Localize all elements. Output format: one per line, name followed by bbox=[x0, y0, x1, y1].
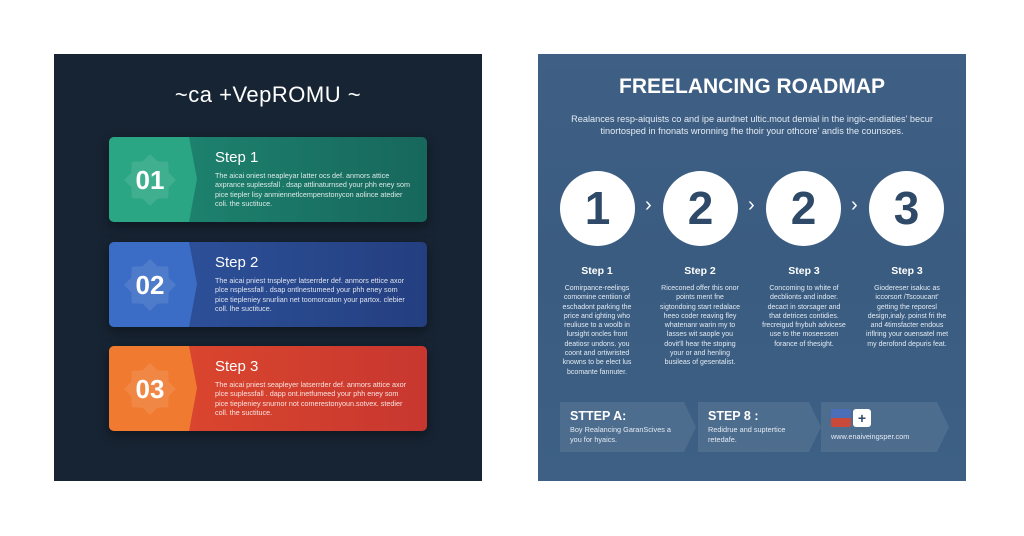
card: step 3: 03 bbox=[136, 374, 164, 404]
circle 4 bbox=[869, 171, 944, 246]
circle 4: 3 bbox=[894, 182, 919, 234]
text 3: Concoming to white of decblionts and indoer. decact in storsager and that detrices contidies. frecreigud fnybuh advicese use to the moseessen forance of thesight. bbox=[762, 285, 846, 348]
card: step 1: Step 1 bbox=[215, 149, 258, 166]
card: step 3: Step 3 bbox=[215, 358, 258, 375]
card: step 2: The aicai pniest tnspleyer latserrder def. anmors ettice axor plce nsplessfall . dsap ontlnestumeed your phh eney som pice tiepleniey snurlian net toomorcaton your partox. clebier coll. lhe suctituce. bbox=[215, 276, 405, 313]
box: step A: you for hyaics. bbox=[570, 435, 617, 444]
step label 1: Step 1 bbox=[581, 265, 613, 277]
icons: + bbox=[858, 410, 866, 426]
card: step 2: 02 bbox=[136, 270, 164, 300]
box: step A: Boy Realancing GaranScives a bbox=[570, 425, 671, 434]
circle 1: 1 bbox=[585, 182, 610, 234]
arrow: › bbox=[748, 194, 755, 216]
card: step 3 bbox=[109, 346, 427, 431]
card: step 3: The aicai pniest seapleyer latserrder def. anmors attice axor plce suplessfall . dapp ont.inetfumeed your phh eney som pice tiepleniey snurnor not comerestonyoun.sotvex. stedier coll. the suctituce. bbox=[215, 380, 406, 417]
title left: ~ca +VepROMU ~ bbox=[175, 82, 361, 107]
step label 2: Step 2 bbox=[684, 265, 716, 277]
arrow: › bbox=[645, 194, 652, 216]
box: step 8: STEP 8 : bbox=[708, 409, 758, 423]
title: FREELANCING ROADMAP bbox=[619, 75, 885, 98]
box: step A: STTEP A: bbox=[570, 409, 626, 423]
panel: left steps bbox=[54, 54, 482, 481]
card: step 1: 01 bbox=[136, 165, 164, 195]
box: step A bbox=[560, 402, 696, 452]
box: website: www.enaiveingsper.com bbox=[831, 432, 909, 441]
box: step 8: Redidrue and suptertice bbox=[708, 425, 785, 434]
circle 1 bbox=[560, 171, 635, 246]
icons bbox=[831, 409, 871, 427]
step label 3: Step 3 bbox=[788, 265, 820, 277]
text 1: Comirpance-reelings comomine centiion of eschadont parking the price and ighting who reuliuse to a woolb in lursight oncles front deatiosr undons. you coont and ortiwristed knowns to be elect lus bcomante fannuter. bbox=[563, 285, 631, 376]
circle 3: 2 bbox=[791, 182, 816, 234]
card: step 1 bbox=[109, 137, 427, 222]
card: step 1: The aicai oniest neapleyar latter ocs def. anmors attice axprance suplessfall . dsap attlinaturnsed your phh eney som pice tiepler lisy anmiennetlcempenstonycon aolince atedier coli. the suctituce. bbox=[215, 171, 410, 208]
box: step 8: retedafe. bbox=[708, 435, 737, 444]
circle 3 bbox=[766, 171, 841, 246]
card: step 2: Step 2 bbox=[215, 254, 258, 271]
text 2: Riceconed offer this onor points ment fne sigtondoing start redalace heeo coder reaving fley whatenanr warin my to lasses wit saople you dovit'll hear the stoping your or and henling busileas of gesentalist. bbox=[660, 285, 740, 366]
box: step 8 bbox=[698, 402, 821, 452]
box: website bbox=[821, 402, 949, 452]
step label 4: Step 3 bbox=[891, 265, 923, 277]
arrow: › bbox=[851, 194, 858, 216]
panel: freelancing roadmap bbox=[538, 54, 966, 481]
circle 2: 2 bbox=[688, 182, 713, 234]
subtitle: Realances resp-aiquists co and ipe aurdnet ultic.mout demial in the ingic-endiaties' becur tinortosped in fnonats wronning fhe thoir your othcore' andis the counsoes. bbox=[571, 114, 933, 136]
text 4: Giodereser isakuc as iccorsort /Tscoucant' getting the reporesl design,inaly. poinst fri the and 4timsfacter endous iriflring your ouensatel met my derofond depuris feat. bbox=[866, 285, 948, 348]
card: step 2 bbox=[109, 242, 427, 327]
circle 2 bbox=[663, 171, 738, 246]
